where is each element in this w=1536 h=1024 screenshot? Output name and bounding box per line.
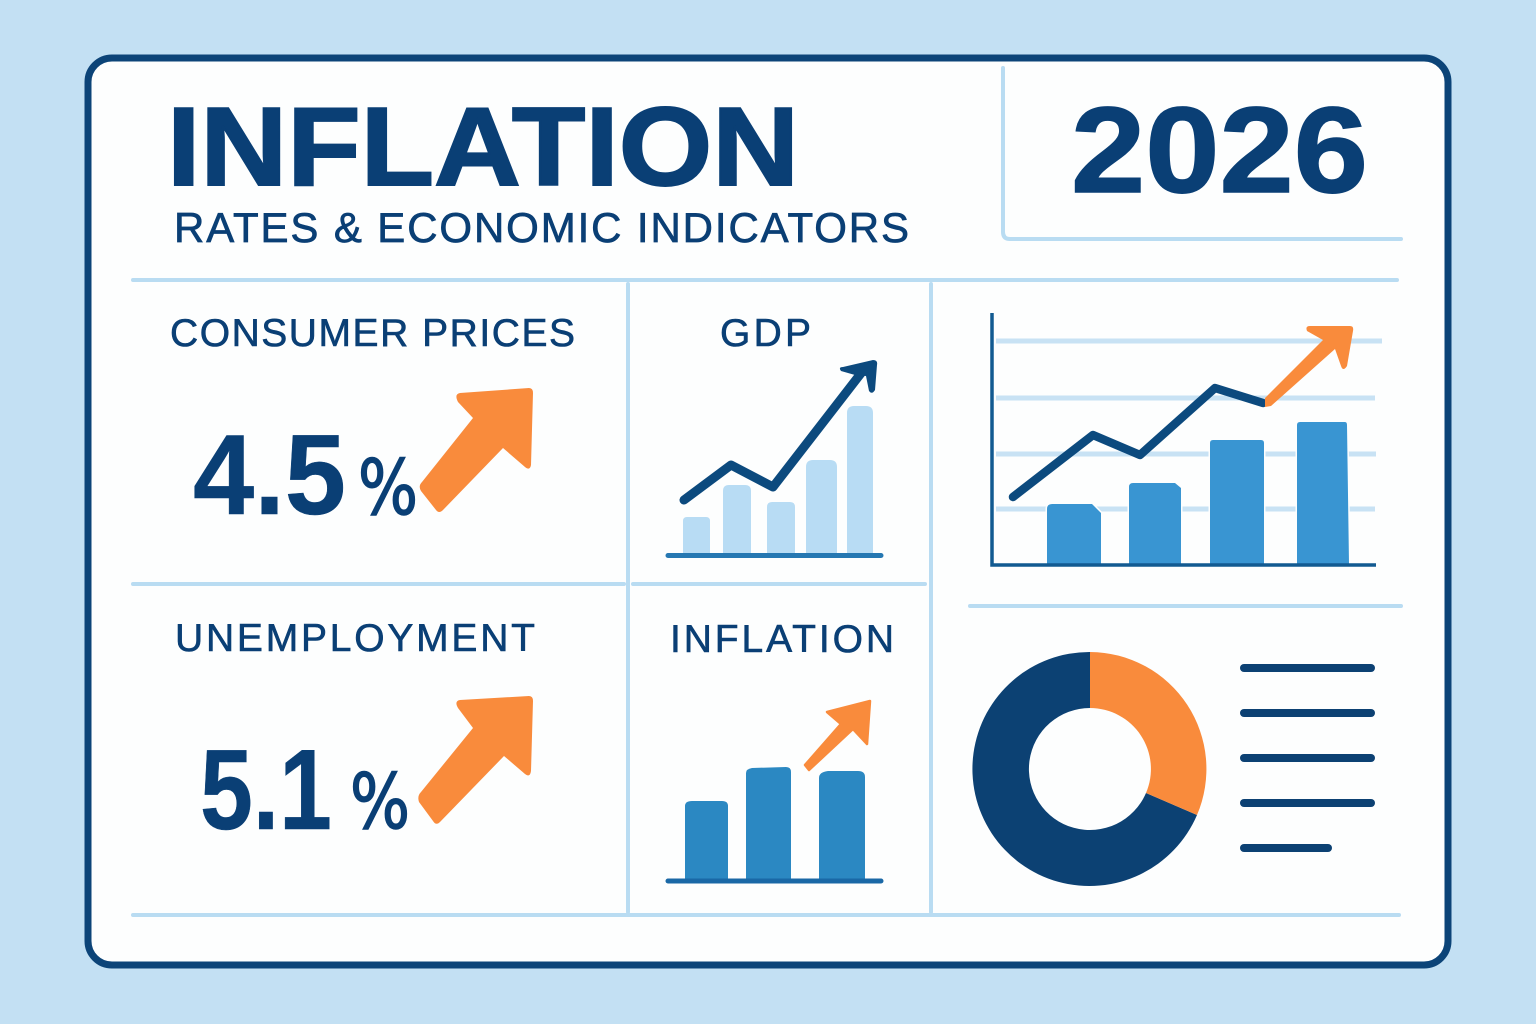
year: 2026 xyxy=(1071,82,1368,218)
panel: donut chart xyxy=(972,652,1371,886)
chart: gdp bars xyxy=(683,406,873,554)
chart: bars xyxy=(1047,422,1349,564)
value: 4.5%: % xyxy=(358,443,418,532)
chart: inflation bars xyxy=(685,767,865,880)
icon: orange arrow up xyxy=(420,388,533,512)
heading: inflation: INFLATION xyxy=(670,618,894,661)
icon: inflation arrow xyxy=(805,701,870,770)
value: 5.1%: % xyxy=(350,757,410,846)
heading: gdp: GDP xyxy=(720,312,811,355)
donut: navy segment xyxy=(972,652,1197,886)
axis: gdp baseline xyxy=(668,553,881,558)
heading: unemployment: UNEMPLOYMENT xyxy=(175,617,535,660)
value: 5.1%: 5.1 xyxy=(200,727,332,854)
panel: large combo chart xyxy=(992,313,1382,565)
line: trend xyxy=(1013,388,1263,497)
icon: gdp arrowhead xyxy=(840,360,877,393)
donut: orange segment xyxy=(1090,652,1206,815)
icon: orange arrow xyxy=(1265,326,1353,407)
title: INFLATION xyxy=(167,85,799,209)
panel: unemployment xyxy=(175,617,535,854)
panel: gdp xyxy=(668,312,881,556)
icon: orange arrow up xyxy=(418,696,533,824)
heading: consumer prices: CONSUMER PRICES xyxy=(170,312,575,355)
axis: inflation baseline xyxy=(668,878,881,884)
subtitle: RATES & ECONOMIC INDICATORS xyxy=(174,204,909,251)
axes xyxy=(992,313,1376,565)
line: gdp trend xyxy=(684,372,862,500)
grid lines xyxy=(996,341,1382,509)
value: 4.5%: 4.5 xyxy=(193,412,346,539)
legend lines xyxy=(1244,668,1371,848)
panel: inflation xyxy=(668,618,894,881)
main card xyxy=(88,58,1448,965)
panel: consumer prices xyxy=(170,312,575,539)
